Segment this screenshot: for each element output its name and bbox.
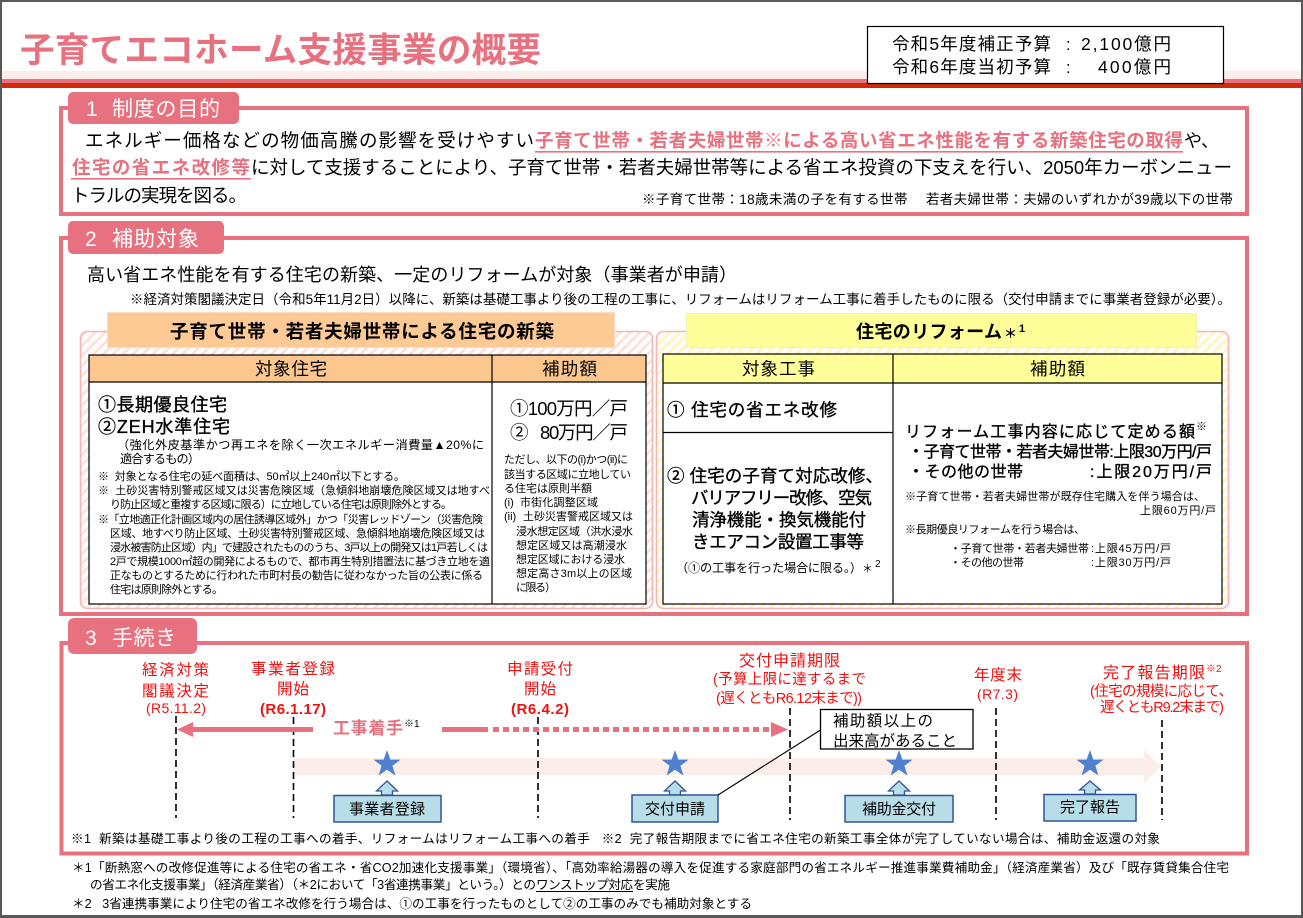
subsidy amounts: reform: ・その他の世帯	[950, 556, 1024, 569]
purpose text: トラルの実現を図る。	[71, 185, 247, 206]
eligible works: ① 住宅の省エネ改修	[667, 400, 838, 420]
milestone: application deadline: (遅くともR6.12末まで))	[716, 690, 862, 707]
purpose text	[71, 130, 1232, 206]
milestone: completion report deadline: ※2	[1206, 664, 1222, 675]
subsidy amounts: new housing: 該当する区域に立地してい	[504, 467, 631, 481]
milestone: registration start	[251, 660, 335, 818]
milestone: application start: (R6.4.2)	[511, 701, 569, 718]
eligible housing list: 区域、地すべり防止区域、土砂災害特別警戒区域、急傾斜地崩壊危険区域又は	[110, 526, 485, 540]
eligible housing list: 浸水被害防止区域）内」で建設されたもののうち、3戸以上の開発又は1戸若しくは	[110, 540, 488, 554]
purpose text: エネルギー価格などの物価高騰の影響を受けやすい	[85, 130, 534, 151]
subsidy amounts: new housing: 80万円／戸	[540, 422, 628, 443]
subsidy amounts: reform: ・子育て世帯・若者夫婦世帯	[950, 542, 1089, 555]
reform heading: 1	[1019, 323, 1025, 335]
subsidy amounts: reform: リフォーム工事内容に応じて定める額	[905, 423, 1195, 441]
heading: 3 手続き	[68, 618, 197, 654]
milestone: registration start: (R6.1.17)	[260, 701, 326, 718]
purpose text: に対して支援することにより、子育て世帯・若者夫婦世帯等による省エネ投資の下支えを行い、2050年カーボンニュー	[251, 157, 1232, 178]
purpose text: や	[1184, 131, 1202, 151]
milestone: application deadline	[713, 652, 866, 820]
subsidy amounts: reform: :上限45万円/戸	[1091, 542, 1171, 555]
reform table: 補助額	[1030, 359, 1086, 379]
milestone: application deadline: (予算上限に達するまで	[713, 671, 866, 688]
eligible housing list: 適合するもの）	[120, 452, 200, 466]
step: completion report: 完了報告	[1060, 799, 1120, 816]
milestone: cabinet decision	[142, 661, 209, 818]
footnotes	[72, 860, 1229, 911]
reform heading: 住宅のリフォーム	[856, 322, 1002, 342]
budget box: 令和5年度補正予算	[892, 34, 1051, 54]
heading: 3 手続き: 手続き	[112, 627, 176, 650]
subsidy amounts: reform: ・子育て世帯・若者夫婦世帯:上限30万円/戸	[908, 443, 1212, 461]
subsidy amounts: reform: 上限60万円/戸	[1140, 504, 1216, 517]
milestone: application deadline: 交付申請期限	[739, 652, 840, 670]
subsidy amounts: new housing: る住宅は原則半額	[504, 481, 592, 495]
target note: ※経済対策閣議決定日（令和5年11月2日）以降に、新築は基礎工事より後の工程の工事に、リフォームはリフォーム工事に着手したものに限る（交付申請までに事業者登録が必要）。	[130, 291, 1231, 307]
milestone: completion report deadline: 遅くともR9.2末まで)	[1100, 699, 1224, 716]
step: business registration: 事業者登録	[349, 801, 425, 818]
subsidy amounts: reform: :上限30万円/戸	[1091, 556, 1171, 569]
reform heading: ＊	[1004, 326, 1017, 341]
eligible works: ② 住宅の子育て対応改修、	[667, 466, 883, 486]
reform table: 対象工事	[742, 359, 815, 379]
budget box	[868, 26, 1224, 84]
purpose text: 、	[1201, 131, 1219, 151]
eligible works: きエアコン設置工事等	[692, 532, 864, 552]
budget box: :	[1066, 36, 1071, 54]
milestone: fiscal year end	[974, 666, 1022, 820]
milestone: registration start: 開始	[277, 680, 309, 698]
milestone: application start	[507, 660, 573, 818]
step: subsidy payment	[845, 750, 953, 822]
panel: reform	[656, 314, 1228, 608]
eligible housing list: （強化外皮基準かつ再エネを除く一次エネルギー消費量▲20%に	[117, 437, 484, 452]
subsidy amounts: new housing: 市街化調整区域	[520, 495, 598, 509]
eligible housing list: ※ 対象となる住宅の延べ面積は、50㎡以上240㎡以下とする。	[98, 469, 405, 483]
subsidy amounts: new housing: ）	[545, 581, 556, 594]
heading: 1 制度の目的: 制度の目的	[112, 98, 220, 121]
eligible works: （①の工事を行った場合に限る。）	[676, 561, 862, 575]
heading: 2 補助対象: 2	[85, 228, 97, 251]
panel: 3 procedure	[62, 618, 1247, 854]
milestone: cabinet decision: 経済対策	[142, 661, 209, 679]
new housing table: 補助額	[542, 359, 598, 379]
heading: 2 補助対象	[68, 221, 224, 254]
milestone: cabinet decision: (R5.11.2)	[146, 700, 206, 716]
budget box: :	[1066, 59, 1071, 77]
callout: output requirement: 出来高があること	[833, 732, 957, 750]
footnotes: ＊2 3省連携事業により住宅の省エネ改修を行う場合は、①の工事を行ったものとして②の工事のみでも補助対象とする	[72, 896, 752, 911]
eligible works: 2	[875, 559, 881, 570]
milestone: registration start: 事業者登録	[251, 660, 335, 678]
eligible housing list: 2戸で規模1000㎡超の開発によるもので、都市再生特別措置法に基づき立地を適	[110, 554, 490, 568]
milestone: cabinet decision: 閣議決定	[142, 682, 209, 700]
subsidy amounts: new housing: 想定高さ3m以上の区域	[516, 566, 632, 580]
subsidy amounts: reform: :上限20万円/戸	[1090, 463, 1212, 481]
eligible housing list: り防止区域と重複する区域に限る）に立地している住宅は原則除外とする。	[110, 497, 452, 511]
eligible housing list	[98, 395, 490, 596]
eligible housing list: ①長期優良住宅	[98, 395, 227, 415]
eligible works: ＊	[862, 563, 873, 575]
subsidy amounts: new housing: 想定区域又は高潮浸水	[516, 538, 627, 552]
milestone: completion report deadline: (住宅の規模に応じて、	[1090, 683, 1233, 700]
purpose text: 住宅の省エネ改修等	[72, 157, 250, 178]
heading: 1 制度の目的	[68, 92, 239, 124]
construction start arrows: 工事着手	[333, 718, 403, 738]
reform table	[663, 354, 1222, 604]
milestone: fiscal year end: 年度末	[974, 666, 1022, 684]
budget box: 2,100億円	[1081, 34, 1171, 54]
step: grant application	[632, 750, 718, 822]
subsidy amounts: reform: ※長期優良リフォームを行う場合は、	[905, 523, 1085, 536]
milestone: application start: 開始	[524, 680, 556, 698]
step: business registration	[334, 750, 441, 822]
subsidy amounts: new housing: に限る	[516, 581, 546, 594]
construction start arrows: ※1	[404, 719, 420, 730]
new housing table: 対象住宅	[255, 359, 327, 379]
milestone: application start: 申請受付	[507, 660, 573, 678]
heading: 3 手続き: 3	[85, 627, 97, 650]
step: subsidy payment: 補助金交付	[862, 801, 936, 818]
eligible housing list: 住宅は原則除外とする。	[110, 582, 223, 596]
title: 子育てエコホーム支援事業の概要	[20, 32, 541, 70]
eligible housing list: ※ 土砂災害特別警戒区域又は災害危険区域（急傾斜地崩壊危険区域又は地すべ	[98, 483, 490, 497]
new housing table	[89, 355, 646, 604]
milestone: completion report deadline	[1090, 664, 1233, 820]
eligible works: バリアフリー改修、空気	[691, 488, 872, 508]
footnotes: ＊1「断熱窓への改修促進等による住宅の省エネ・省CO2加速化支援事業」（環境省）、「高効率給湯器の導入を促進する家庭部門の省エネルギー推進事業費補助金」（経済産業省）及び「既存賃貸集合住宅	[72, 860, 1229, 875]
subsidy amounts: new housing: ②	[510, 422, 529, 443]
budget box: 400億円	[1098, 57, 1171, 77]
subsidy amounts: new housing: 土砂災害警戒区域又は	[523, 509, 633, 523]
subsidy amounts: reform: ※	[1196, 421, 1207, 433]
subsidy amounts: new housing	[504, 398, 633, 594]
eligible housing list: 正なものとするために行われた市町村長の勧告に従わなかった旨の公表に係る	[110, 568, 483, 582]
subsidy amounts: reform: ・その他の世帯	[908, 463, 1023, 481]
target summary: 高い省エネ性能を有する住宅の新築、一定のリフォームが対象（事業者が申請）	[87, 265, 737, 285]
footnotes: を実施	[633, 877, 670, 892]
subsidy amounts: new housing: ただし、以下の(i)かつ(ii)に	[504, 453, 628, 466]
milestone: completion report deadline: 完了報告期限	[1103, 664, 1205, 682]
purpose text: 子育て世帯・若者夫婦世帯※による高い省エネ性能を有する新築住宅の取得	[535, 130, 1183, 151]
subsidy amounts: new housing: (ii)	[504, 511, 516, 523]
subsidy amounts: new housing: 浸水想定区域（洪水浸水	[516, 524, 633, 538]
heading: 1 制度の目的: 1	[86, 98, 98, 121]
subsidy amounts: new housing: ①100万円／戸	[510, 398, 628, 419]
step: completion report	[1044, 750, 1136, 821]
milestone: fiscal year end: (R7.3)	[977, 686, 1018, 702]
step: grant application: 交付申請	[645, 801, 705, 818]
reform heading	[686, 314, 1196, 348]
procedure note: ※1 新築は基礎工事より後の工程の工事への着手、リフォームはリフォーム工事への着手 ※2 完了報告期限までに省エネ住宅の新築工事全体が完了していない場合は、補助金返還の対象	[71, 831, 1160, 846]
heading: 2 補助対象: 補助対象	[112, 228, 199, 251]
panel: new housing	[80, 312, 652, 608]
callout: output requirement	[718, 710, 973, 795]
subsidy amounts: reform: ※子育て世帯・若者夫婦世帯が既存住宅購入を伴う場合は、	[905, 489, 1205, 503]
eligible works: 清浄機能・換気機能付	[692, 510, 866, 530]
panel: 2 subsidy targets	[61, 221, 1247, 614]
construction start arrows	[177, 718, 788, 738]
new housing heading: 子育て世帯・若者夫婦世帯による住宅の新築	[170, 321, 554, 342]
timeline band arrow	[293, 750, 1161, 783]
subsidy amounts: reform	[905, 421, 1216, 569]
budget box: 令和6年度当初予算	[892, 57, 1051, 77]
panel: 1 purpose	[61, 92, 1247, 214]
subsidy amounts: new housing: (i)	[504, 497, 514, 509]
eligible housing list: ※「立地適正化計画区域内の居住誘導区域外」かつ「災害レッドゾーン（災害危険	[98, 512, 483, 526]
footnotes: の省エネ化支援事業」（経済産業省）（＊2において「3省連携事業」という。）との	[90, 877, 536, 892]
eligible works	[667, 400, 883, 575]
callout: output requirement: 補助額以上の	[833, 712, 933, 730]
purpose footnote: ※子育て世帯：18歳未満の子を有する世帯 若者夫婦世帯：夫婦のいずれかが39歳以下の世帯	[642, 191, 1233, 207]
new housing heading	[108, 312, 614, 348]
subsidy amounts: new housing: 想定区域における浸水	[516, 552, 625, 566]
footnotes: ワンストップ対応	[536, 878, 633, 892]
eligible housing list: ②ZEH水準住宅	[98, 417, 230, 437]
title band	[2, 71, 1301, 88]
